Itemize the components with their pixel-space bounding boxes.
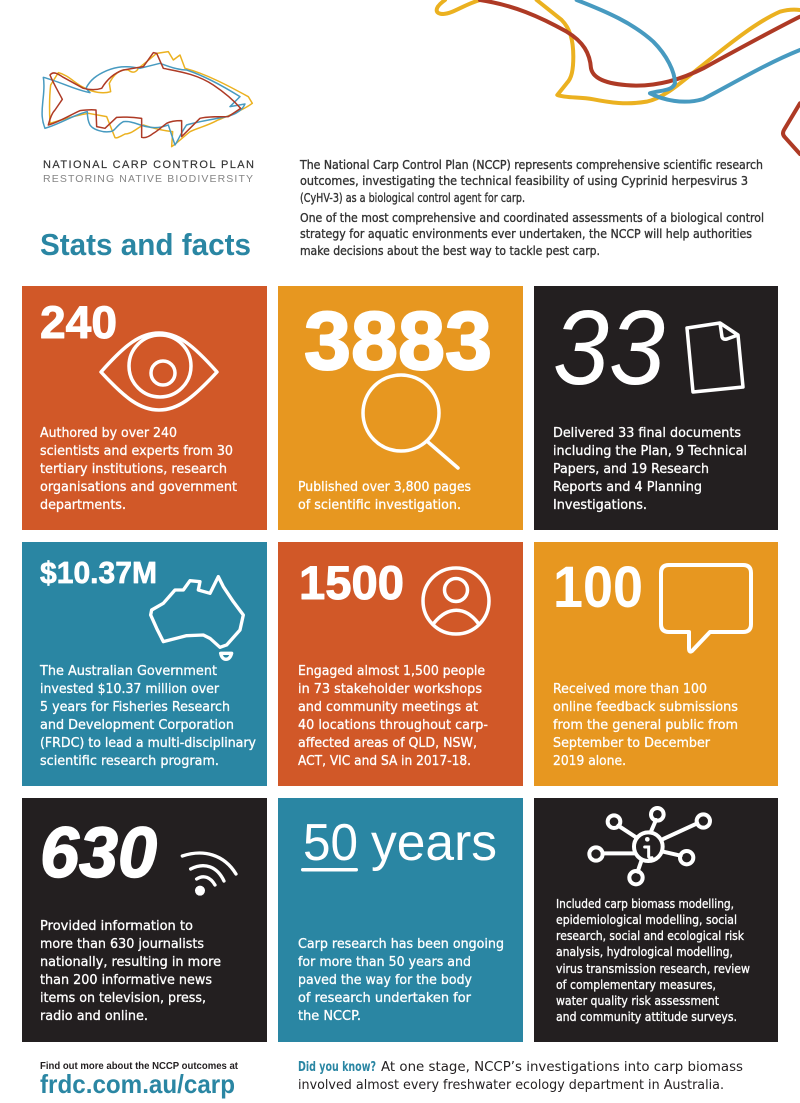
panel: 50 years: of research undertaken for xyxy=(298,990,471,1006)
panel: 50 years: Carp research has been ongoing xyxy=(298,936,504,952)
callout: did you know: involved almost every freshwater ecology department in Australia. xyxy=(298,1077,724,1093)
panel: 3883 pages xyxy=(278,286,523,530)
panel: 33 documents: Reports and 4 Planning xyxy=(553,479,702,495)
panel: research methods: Included carp biomass modelling, xyxy=(556,897,734,911)
panel: research methods: epidemiological modelling, social xyxy=(556,913,737,927)
panel: 240 authors: tertiary institutions, research xyxy=(40,461,227,477)
panel: 100 submissions: online feedback submissions xyxy=(553,699,738,715)
panel: 630 journalists: items on television, press, xyxy=(40,990,206,1006)
panel: 1500 people: and community meetings at xyxy=(298,699,478,715)
panel: $10.37M funding: scientific research program. xyxy=(40,753,219,769)
panel: 33 documents: including the Plan, 9 Technical xyxy=(553,443,747,459)
logo fish mark xyxy=(42,52,252,147)
panel: $10.37M funding: (FRDC) to lead a multi-disciplinary xyxy=(40,735,256,751)
intro text: make decisions about the best way to tackle pest carp. xyxy=(300,244,600,258)
icon: information network xyxy=(589,808,710,884)
panel: $10.37M funding xyxy=(22,542,267,786)
panel: research methods: research, social and ecological risk xyxy=(556,929,744,943)
panel: 100 submissions: 100 xyxy=(553,555,643,620)
panel: $10.37M funding: 5 years for Fisheries Research xyxy=(40,699,230,715)
intro text: The National Carp Control Plan (NCCP) represents comprehensive scientific research xyxy=(299,158,763,172)
icon: document xyxy=(687,323,743,392)
panel: 50 years: paved the way for the body xyxy=(298,972,472,988)
decorative fish outline top right xyxy=(437,0,800,154)
panel: research methods: virus transmission research, review xyxy=(556,962,750,976)
icon: magnifying glass xyxy=(363,375,458,468)
intro text: One of the most comprehensive and coordinated assessments of a biological control xyxy=(300,211,764,225)
panel: 240 authors: organisations and government xyxy=(40,479,237,495)
panel: 33 documents xyxy=(534,286,778,530)
icon: person in circle xyxy=(423,568,489,634)
panel: research methods: and community attitude surveys. xyxy=(556,1010,737,1024)
panel: 1500 people: in 73 stakeholder workshops xyxy=(298,681,482,697)
panel: 1500 people: affected areas of QLD, NSW, xyxy=(298,735,477,751)
panel: 240 authors: Authored by over 240 xyxy=(40,425,177,441)
panel: 240 authors: 240 xyxy=(40,297,117,348)
panel: 100 submissions: from the general public from xyxy=(553,717,738,733)
panel: 100 submissions: September to December xyxy=(553,735,710,751)
panel: 1500 people xyxy=(278,542,523,786)
panel: 100 submissions: Received more than 100 xyxy=(553,681,707,697)
panel: 3883 pages: Published over 3,800 pages xyxy=(298,479,471,495)
logo: National Carp Control Plan: RESTORING NATIVE BIODIVERSITY xyxy=(43,173,253,185)
panel: 3883 pages: of scientific investigation. xyxy=(298,497,461,513)
panel: 50 years: years xyxy=(371,814,497,872)
panel: 1500 people: ACT, VIC and SA in 2017-18. xyxy=(298,753,471,769)
panel: 33 documents: 33 xyxy=(553,289,665,407)
panel: 33 documents: Delivered 33 final documents xyxy=(553,425,741,441)
icon: eye xyxy=(101,333,217,410)
panel: 630 journalists: radio and online. xyxy=(40,1008,148,1024)
panel: 1500 people: 1500 xyxy=(299,556,404,609)
panel: 100 submissions: 2019 alone. xyxy=(553,753,626,769)
icon: wifi signal xyxy=(182,853,236,896)
panel: 630 journalists: nationally, resulting in more xyxy=(40,954,221,970)
panel: research methods: water quality risk assessment xyxy=(556,994,719,1008)
callout: did you know xyxy=(298,1059,743,1093)
panel: 100 submissions xyxy=(534,542,778,786)
logo: National Carp Control Plan xyxy=(42,52,254,185)
panel: 630 journalists: than 200 informative news xyxy=(40,972,212,988)
icon: speech bubble xyxy=(661,565,751,652)
panel: 50 years: 50 xyxy=(303,814,358,872)
panel: 240 authors: scientists and experts from 30 xyxy=(40,443,233,459)
intro text: strategy for aquatic environments ever undertaken, the NCCP will help authorities xyxy=(300,227,752,241)
panel: research methods: of complementary measures, xyxy=(556,978,716,992)
panel: 33 documents: Papers, and 19 Research xyxy=(553,461,709,477)
panel: 630 journalists xyxy=(22,798,267,1042)
panel: research methods: analysis, hydrological modelling, xyxy=(556,945,733,959)
intro text xyxy=(299,158,764,258)
callout: did you know: Did you know? xyxy=(298,1059,376,1075)
panel: $10.37M funding: and Development Corporation xyxy=(40,717,234,733)
footer link: frdc.com.au/carp xyxy=(40,1069,235,1099)
intro text: outcomes, investigating the technical feasibility of using Cyprinid herpesvirus 3 xyxy=(300,174,748,188)
panel: $10.37M funding: The Australian Government xyxy=(39,663,217,679)
panel: 1500 people: Engaged almost 1,500 people xyxy=(298,663,485,679)
intro text: (CyHV-3) as a biological control agent for carp. xyxy=(300,191,525,205)
callout: did you know: At one stage, NCCP’s investigations into carp biomass xyxy=(381,1059,743,1075)
panel: 1500 people: 40 locations throughout carp- xyxy=(298,717,488,733)
panel: 50 years xyxy=(278,798,523,1042)
logo: National Carp Control Plan: NATIONAL CARP CONTROL PLAN xyxy=(43,159,254,171)
icon: map of Australia xyxy=(151,577,243,659)
panel: 240 authors: departments. xyxy=(40,497,126,513)
panel: 630 journalists: Provided information to xyxy=(40,918,193,934)
heading: Stats and facts: Stats and facts xyxy=(40,227,251,262)
panel: 240 authors xyxy=(22,286,267,530)
panel: 3883 pages: 3883 xyxy=(304,294,492,387)
panel: 50 years: for more than 50 years and xyxy=(298,954,471,970)
panel: $10.37M funding: invested $10.37 million over xyxy=(40,681,219,697)
panel: 33 documents: Investigations. xyxy=(553,497,647,513)
panel: $10.37M funding: $10.37M xyxy=(40,555,157,590)
panel: 630 journalists: 630 xyxy=(40,814,157,893)
footer link: Find out more about the NCCP outcomes at xyxy=(40,1060,238,1072)
panel: 630 journalists: more than 630 journalists xyxy=(40,936,204,952)
panel: research methods xyxy=(534,798,778,1042)
panel: 50 years: the NCCP. xyxy=(298,1008,361,1024)
